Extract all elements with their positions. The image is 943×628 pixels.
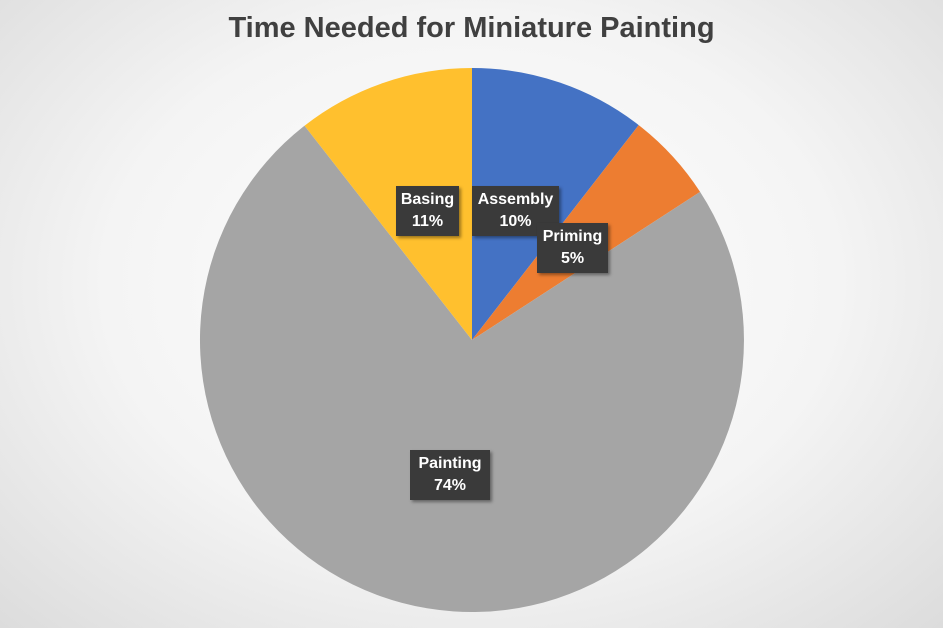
slice: priming	[472, 125, 700, 340]
title: Time Needed for Miniature Painting	[228, 12, 715, 44]
label: assembly: Assembly	[478, 191, 553, 208]
label: assembly	[472, 186, 559, 236]
label: basing	[396, 186, 459, 236]
slice: assembly	[472, 68, 639, 340]
label: assembly: 10%	[499, 213, 532, 230]
label: basing: 11%	[412, 213, 443, 230]
label: basing: Basing	[401, 191, 454, 208]
label: priming: Priming	[543, 228, 602, 245]
label: painting: 74%	[434, 477, 466, 494]
label: priming: 5%	[561, 250, 584, 267]
label: priming	[537, 223, 608, 273]
label: painting	[410, 450, 490, 500]
label: painting: Painting	[418, 455, 482, 472]
slice: painting	[200, 126, 744, 612]
slice: basing	[304, 68, 472, 340]
